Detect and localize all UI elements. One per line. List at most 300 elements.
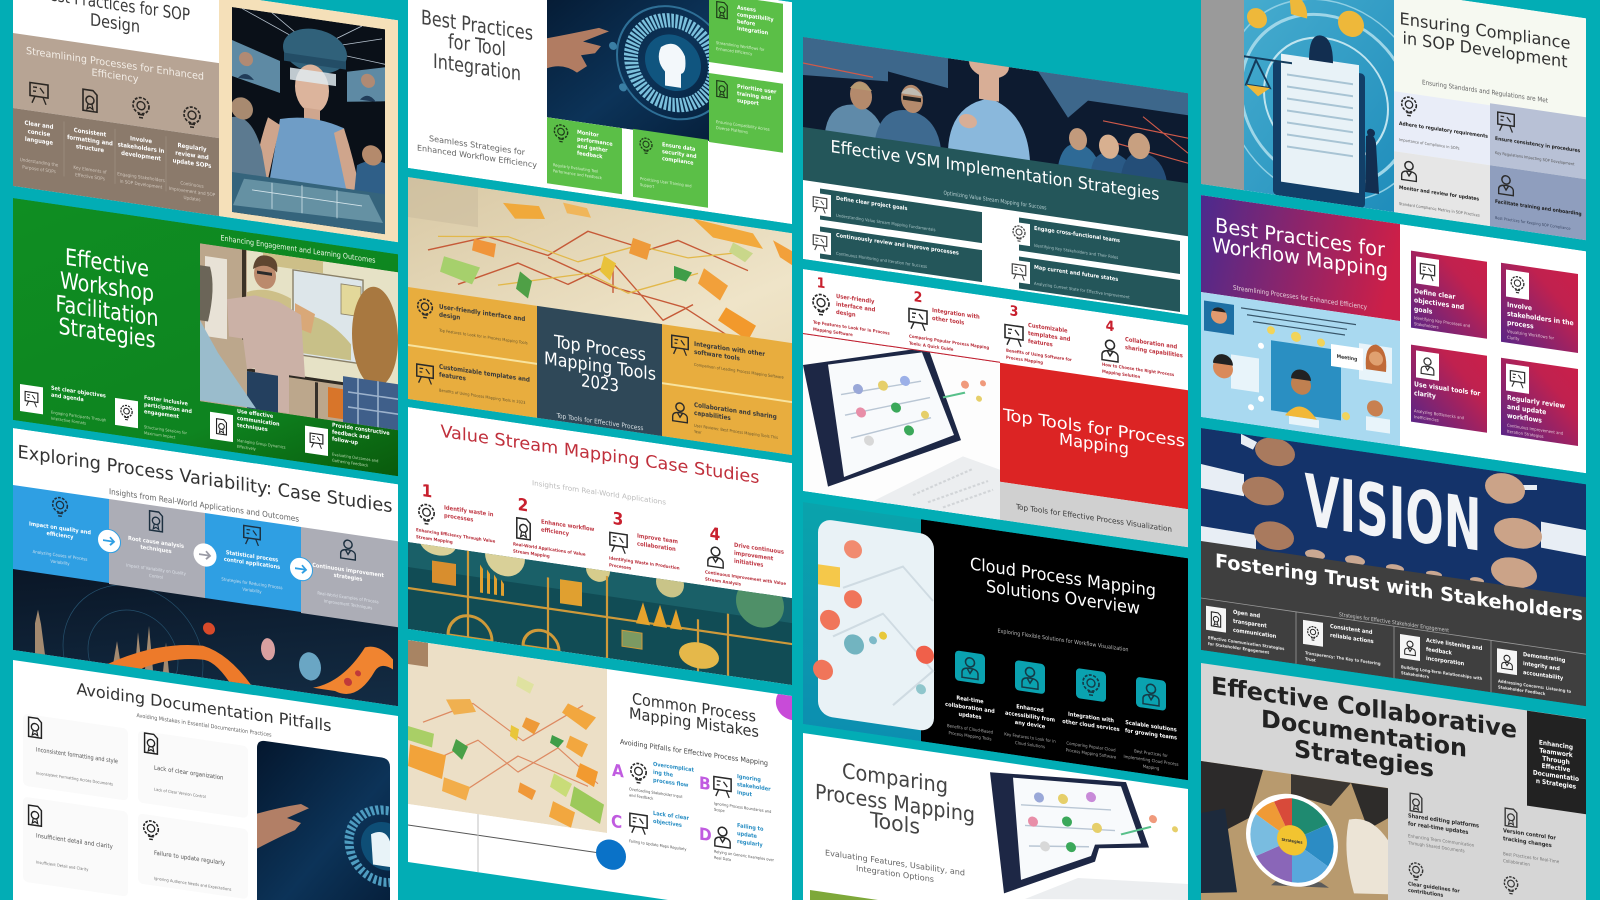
item: open communication: Open and <box>1233 610 1261 620</box>
image: VISION banner with hands <box>1201 427 1587 600</box>
red rule <box>803 333 1000 363</box>
column captions: Engaging Stakeholders <box>117 171 165 184</box>
card: define objectives: goals <box>1414 305 1433 316</box>
item: provide constructive feedback <box>305 419 390 471</box>
panel: consistency: Key Regulations Impacting SOP Development <box>1495 150 1575 167</box>
numbers: 1 <box>817 275 825 292</box>
card: monitor performance: Regularly Evaluating Tool <box>553 162 598 174</box>
subtitle: Evaluating Features, Usability, and <box>825 848 965 878</box>
item labels: Integration with <box>1068 712 1114 724</box>
item labels: improvement <box>734 551 774 562</box>
item: collaboration and sharing: Collaboration and sharing <box>694 402 777 421</box>
item labels: updates <box>959 712 981 721</box>
card: continuously review: Continuous Monitoring and Iteration for Success <box>836 251 927 269</box>
item: use effective communication: communication <box>237 416 280 428</box>
item labels <box>836 294 1183 367</box>
step captions: Control <box>149 573 163 581</box>
title <box>629 689 759 741</box>
numbers: 2 <box>518 495 528 517</box>
item: user-friendly interface: Top Features to Look for in Process Mapping Tools <box>438 327 528 345</box>
numbers: 2 <box>914 289 922 306</box>
item: consistent actions: reliable actions <box>1330 633 1374 645</box>
card: prioritize user training: Prioritize user <box>737 84 777 96</box>
icons <box>419 503 723 568</box>
item: foster inclusive participation <box>115 391 192 442</box>
item captions: Identifying Waste in Production <box>609 555 680 572</box>
numbers: 4 <box>1106 318 1115 335</box>
panel: gradient title <box>1201 195 1400 321</box>
panel: black side note: Effective <box>1542 762 1570 774</box>
item: user-friendly interface: User-friendly interface and <box>439 304 525 323</box>
card: monitor performance: Performance and Feedback <box>553 168 603 180</box>
panel: dark title block: Top Process <box>553 332 646 366</box>
title: Integration <box>433 49 521 85</box>
card: involve stakeholders: Clarity <box>1507 335 1520 342</box>
item: open communication <box>1206 606 1285 657</box>
card: define objectives: objectives and <box>1414 296 1464 311</box>
subtitle: Integration Options <box>856 864 934 884</box>
item: use effective communication: Managing Group Dynamics <box>237 438 286 450</box>
title: Mapping Mistakes <box>629 704 759 741</box>
title: Avoiding Documentation Pitfalls <box>76 679 332 735</box>
panel: gray subtitle: Top Tools for Effective Process Visualization <box>1015 502 1172 534</box>
card: engage cross-functional teams: Identifying Key Stakeholders and Their Roles <box>1034 243 1118 260</box>
column captions: Updates <box>183 195 201 203</box>
item: foster inclusive participation: participation and <box>144 402 192 415</box>
panel: gradient title: Workflow Mapping <box>1212 233 1388 282</box>
card: continuously review: Continuously review and improve processes <box>836 233 959 257</box>
column captions: Continuous <box>180 180 204 190</box>
step captions: Improvement Techniques <box>324 598 372 611</box>
subtitle: Seamless Strategies for <box>429 134 525 157</box>
image: remote collaboration illustration: Meeting <box>1337 354 1357 363</box>
step labels: Root cause analysis <box>128 536 184 550</box>
step labels: control applications <box>224 557 280 571</box>
item: integration with other tools: Comparison of Leading Process Mapping Software <box>694 362 785 380</box>
card: failure to update: Failure to update regularly <box>154 850 226 867</box>
item: user-friendly interface <box>418 298 528 345</box>
subtitle <box>825 848 965 889</box>
item: demonstrating integrity: accountability <box>1523 670 1564 682</box>
band: title: Optimizing Value Stream Mapping for Success <box>944 191 1047 212</box>
item D: D <box>699 825 712 846</box>
item C: C <box>611 812 622 833</box>
item: collaboration and sharing: capabilities <box>694 410 731 422</box>
card: define objectives: Define clear <box>1414 287 1456 301</box>
item labels: Drive continuous <box>734 543 784 556</box>
card: monitor performance: Monitor <box>577 130 599 139</box>
subtitle: Insights from Real-World Applications and Outcomes <box>109 487 299 524</box>
item: collaboration and sharing <box>673 399 778 446</box>
numbers <box>817 275 1115 335</box>
item: shared editing <box>1407 793 1479 857</box>
image: VISION banner with hands: VISION <box>1304 459 1481 569</box>
image: sticky-note process map <box>408 640 607 833</box>
item labels: User-friendly <box>836 294 875 306</box>
slide: Cloud Process Mapping Solutions Overview <box>803 502 1188 780</box>
item: shared editing: Enhancing Team Communication <box>1408 833 1475 849</box>
card: map current and future states: Analyzing Current State for Effective Improvement <box>1034 281 1130 300</box>
item: active listening: Building Long-Term Relationships with <box>1401 664 1483 681</box>
panel: adhere: Importance of Compliance in SOPs <box>1399 137 1460 151</box>
item labels: interface and <box>836 302 876 314</box>
item: open communication: Effective Communication Strategies <box>1208 635 1285 651</box>
item D: update <box>737 831 758 840</box>
card: engage cross-functional teams: Engage cross-functional teams <box>1034 226 1120 244</box>
decorative corner circle <box>776 694 792 720</box>
item labels: Real-time <box>956 695 984 705</box>
subtitle: Exploring Flexible Solutions for Workflow Visualization <box>998 628 1128 654</box>
slide: Comparing Process Mapping Tools <box>803 733 1188 900</box>
column text: development <box>121 150 161 163</box>
panel: consistency <box>1490 103 1586 179</box>
item A <box>612 756 694 807</box>
numbers: 3 <box>1010 303 1018 320</box>
gray side strip <box>1201 0 1244 190</box>
card: define project goals: Understanding Value Stream Mapping Fundamentals <box>836 213 935 232</box>
item captions <box>947 721 1178 775</box>
item: shared editing: Through Shared Documents <box>1407 840 1465 854</box>
card: prioritize user training: Ensuring Compatibility Across <box>716 119 770 132</box>
item: demonstrating integrity: Addressing Concerns: Listening to <box>1498 678 1572 694</box>
title: for Tool <box>448 29 506 61</box>
image: compliance clipboard illustration <box>1244 0 1394 212</box>
item B <box>699 769 771 820</box>
item D: Real Data <box>714 855 731 862</box>
item: version control: Best Practices for Real-Time <box>1503 851 1560 865</box>
panel: facilitate training <box>1490 165 1586 240</box>
icons row <box>30 81 200 128</box>
card: regularly review: Iteration Strategies <box>1507 429 1544 439</box>
card: continuously review <box>809 225 982 282</box>
item labels: collaboration and <box>945 702 995 715</box>
item labels: Identify waste in <box>444 505 494 519</box>
subtitle <box>26 46 204 95</box>
panel: facilitate training: Facilitate training and onboarding <box>1495 199 1582 218</box>
card: ensure data security: Ensure data <box>662 142 695 153</box>
card: define objectives: Identifying Key Processes and <box>1414 315 1471 328</box>
item labels: Customizable <box>1028 323 1068 335</box>
card: monitor performance: performance <box>577 137 613 148</box>
item labels: Enhance workflow <box>541 519 595 533</box>
subtitle: Efficiency <box>92 68 139 85</box>
card: involve stakeholders: Visualizing Workflows for <box>1507 329 1554 341</box>
item labels: initiatives <box>734 559 763 569</box>
card: prioritize user training <box>709 73 783 153</box>
item captions: Enhancing Efficiency Through Value <box>416 527 496 545</box>
column captions <box>20 157 216 206</box>
item labels: collaboration <box>637 541 676 553</box>
panel: monitor <box>1394 151 1490 226</box>
item B: Scope <box>714 807 725 813</box>
item: use effective communication: Use effective <box>237 409 274 420</box>
image: tech hand <box>257 741 421 900</box>
card: ensure data security <box>633 129 708 208</box>
item labels: for growing teams <box>1125 728 1177 742</box>
item: active listening <box>1400 634 1483 687</box>
item D: Failing to <box>737 823 764 833</box>
image: remote collaboration illustration <box>1201 292 1400 446</box>
item captions: Cloud Solutions <box>1015 740 1045 750</box>
image: dark tech landscape <box>13 566 398 764</box>
panel: monitor: Standard Compliance Metrics in SOP Practices <box>1399 201 1480 218</box>
panel: adhere <box>1394 91 1490 165</box>
title: Cloud Process Mapping <box>970 554 1156 602</box>
item captions: Top Features to Look for in Process <box>813 319 890 337</box>
title: Documentation <box>1261 705 1467 763</box>
item: active listening: incorporation <box>1426 656 1465 667</box>
item: open communication: for Stakeholder Engagement <box>1208 641 1269 655</box>
image: teal and gold art deco <box>408 542 792 685</box>
title: Comparing <box>842 758 948 798</box>
item A: and Feedback <box>629 792 654 801</box>
panel: beige image frame <box>219 0 398 242</box>
card: map current and future states: Map current and future states <box>1034 265 1118 283</box>
panel: black side note: Enhancing <box>1539 738 1573 751</box>
title: Common Process <box>632 690 756 726</box>
item: version control: Version control for <box>1503 828 1556 842</box>
photo: facilitator at projected map <box>200 243 398 430</box>
item: shared editing: for real-time updates <box>1408 821 1468 836</box>
item D: regularly <box>737 839 763 849</box>
title: Ensuring Compliance <box>1400 9 1570 53</box>
item labels: features <box>1028 339 1053 348</box>
item captions: Comparing Popular Cloud <box>1066 740 1116 754</box>
item: demonstrating integrity: integrity and <box>1523 661 1560 672</box>
column text: structure <box>76 143 104 154</box>
item: provide constructive feedback: Provide constructive <box>332 423 390 437</box>
item: open communication: transparent <box>1233 619 1267 630</box>
slide: Best Practices for Workflow Mapping <box>1201 195 1586 473</box>
item D <box>699 818 775 869</box>
numbers: 4 <box>710 524 720 546</box>
column captions: Key Elements of <box>73 165 107 176</box>
item C: objectives <box>653 819 682 829</box>
card: assess compatibility: integration <box>737 26 769 37</box>
item: use effective communication <box>210 405 286 456</box>
image: monitor with flow diagram <box>803 334 1000 520</box>
step captions: Variability <box>242 587 262 595</box>
title <box>40 0 190 45</box>
item labels: efficiency <box>541 527 570 538</box>
item: set clear objectives <box>20 381 106 429</box>
item captions <box>416 527 786 594</box>
column text: stakeholders in <box>118 141 165 155</box>
title: Effective Collaborative <box>1211 672 1517 744</box>
panel: dark title block: Top Tools for Effective Process <box>556 412 643 432</box>
card: assess compatibility: Assess <box>737 5 756 14</box>
image: monitor with flow diagram <box>990 762 1188 900</box>
title: Strategies <box>1294 735 1434 783</box>
subtitle: Insights from Real-World Applications <box>532 478 666 507</box>
item: consistent actions: Consistent and <box>1330 624 1373 636</box>
card: define objectives: Stakeholders <box>1414 321 1439 330</box>
item B: stakeholder <box>737 782 771 793</box>
item: consistent actions: Transparency: The Key to Fostering <box>1305 650 1381 666</box>
item captions: Real-World Applications of Value <box>513 541 586 558</box>
card: ensure data security: security and <box>662 149 697 160</box>
card: involve stakeholders: stakeholders in the <box>1507 310 1574 327</box>
item: integration with other tools: software tools <box>694 349 740 363</box>
title: Value Stream Mapping Case Studies <box>440 422 759 488</box>
card: regularly review <box>1501 358 1578 446</box>
item captions <box>813 319 1175 385</box>
image: team around colour wheel <box>1201 761 1388 900</box>
item: set clear objectives: Engaging Participants Through <box>51 410 106 423</box>
card: regularly review: and update <box>1507 403 1546 416</box>
title: Design <box>90 10 140 38</box>
item: active listening: Active listening and <box>1426 638 1483 652</box>
item captions: Process Mapping Software <box>1066 747 1117 761</box>
item labels: other cloud services <box>1062 719 1120 733</box>
item: demonstrating integrity: Stakeholder Feedback <box>1498 684 1546 696</box>
subtitle: Avoiding Mistakes in Essential Documentation Practices <box>136 713 272 739</box>
icons <box>955 650 1166 712</box>
title: Facilitation <box>55 291 158 332</box>
title: Best Practices <box>421 5 533 45</box>
image: process map with sticky notes <box>408 177 792 455</box>
slide: Value Stream Mapping Case Studies <box>408 407 792 685</box>
slide: Best Practices for Tool Integration <box>408 0 792 224</box>
item captions: Best Practices for <box>1134 748 1168 759</box>
item A: Overloading Stakeholder Input <box>629 786 683 799</box>
item: foster inclusive participation: Foster inclusive <box>144 395 189 408</box>
item: collaboration and sharing: Year <box>694 429 702 435</box>
card: regularly review: workflows <box>1507 412 1542 425</box>
card: engage cross-functional teams <box>1008 216 1180 274</box>
item: version control: tracking changes <box>1503 836 1552 849</box>
title: in SOP Development <box>1402 28 1568 72</box>
slide: Exploring Process Variability <box>13 428 398 764</box>
step labels: Statistical process <box>226 550 278 564</box>
item: customizable templates: features <box>439 372 466 383</box>
item captions: Benefits of Using Software for <box>1006 348 1072 363</box>
column captions: Effective SOPs <box>75 172 105 182</box>
title <box>1400 9 1570 72</box>
card: regularly review: Continuous Improvement and <box>1507 423 1564 436</box>
card: failure to update <box>138 813 248 899</box>
card: ensure data security: compliance <box>662 156 694 167</box>
item labels: templates and <box>1028 331 1071 343</box>
card: insufficient detail: Insufficient Detail and Clarity <box>36 859 89 872</box>
column text <box>25 120 211 170</box>
item labels: Enhanced <box>1016 704 1044 714</box>
item: foster inclusive participation: Maximum Impact <box>144 430 176 440</box>
column captions: in SOP Development <box>120 179 163 191</box>
title: Effective <box>65 245 149 283</box>
item: version control <box>1503 808 1560 872</box>
card: assess compatibility: compatibility <box>737 12 774 23</box>
step captions: Impact of Variability on Quality <box>126 563 187 577</box>
process bands <box>13 485 398 627</box>
card: monitor performance: feedback <box>577 151 603 160</box>
card: assess compatibility: Enhanced Efficiency <box>716 46 753 56</box>
slide: Ensuring Compliance in SOP Development <box>1201 0 1586 240</box>
title <box>421 5 533 87</box>
card: failure to update: Ignoring Audience Needs and Expectations <box>154 876 231 892</box>
item labels: Collaboration and <box>1125 337 1178 351</box>
slide: Avoiding Documentation Pitfalls <box>13 660 421 900</box>
card: lack of clear organization: Lack of Clear Version Control <box>154 787 206 799</box>
card: visual tools <box>1411 345 1487 433</box>
title <box>55 243 158 354</box>
panel: gray subtitle <box>1000 482 1188 547</box>
slide: Effective Collaborative Documentation Strategies <box>1201 663 1586 900</box>
card: prioritize user training: Diverse Platforms <box>716 125 748 135</box>
panel: gradient title: Best Practices for <box>1215 213 1386 262</box>
step captions: Real-World Examples of Process <box>317 590 379 605</box>
card: assess compatibility: Streamlining Workflows for <box>716 40 765 52</box>
item: customizable templates <box>417 360 530 406</box>
band: dark panel <box>1201 541 1586 706</box>
item: provide constructive feedback: Gathering Feedback <box>332 458 369 468</box>
card: monitor performance: and gather <box>577 144 608 154</box>
step captions: Analyzing Causes of Process <box>33 549 87 563</box>
step captions: Variability <box>50 558 70 567</box>
title: Exploring Process Variability: Case Studies <box>17 442 392 517</box>
column text: language <box>25 136 53 147</box>
icons <box>53 497 355 560</box>
card: inconsistent formatting: Inconsistent formatting and style <box>36 746 119 765</box>
item labels: Integration with <box>932 308 980 321</box>
title: Solutions Overview <box>986 577 1140 619</box>
lower diagram lines <box>408 804 626 894</box>
item captions: Process Mapping <box>1006 355 1043 366</box>
item captions: Mapping Software <box>813 326 853 338</box>
item: use effective communication: Effectively <box>237 444 257 452</box>
item: provide constructive feedback: Evaluating Outcomes and <box>332 452 378 463</box>
card: inconsistent formatting: Inconsistent Formatting Across Documents <box>36 770 113 787</box>
item: demonstrating integrity <box>1497 648 1572 700</box>
item: consistent actions: Trust <box>1305 656 1316 663</box>
item: provide constructive feedback: feedback and <box>332 430 370 441</box>
item captions: Process Mapping Tools <box>948 730 992 743</box>
panel: left amber items <box>408 287 537 418</box>
item A: process flow <box>653 778 689 789</box>
item B: Ignoring <box>737 774 761 784</box>
card: involve stakeholders: process <box>1507 319 1534 331</box>
slide: Effective Workshop Facilitation Strategies <box>13 198 398 476</box>
item captions: Stream Mapping <box>416 534 453 546</box>
panel: right amber items <box>662 324 792 455</box>
item: user-friendly interface: design <box>439 312 460 322</box>
image: woman with helmet at holographic table <box>232 7 385 234</box>
slide: Top Tools for Process Mapping <box>803 269 1188 547</box>
panel: consistency: Ensure consistency in procedures <box>1495 136 1580 154</box>
card: prioritize user training: training and <box>737 91 772 102</box>
subtitle <box>417 132 538 170</box>
card: prioritize user training: support <box>737 98 759 107</box>
panel: adhere: Adhere to regulatory requirements <box>1399 121 1488 140</box>
item captions: Stream Mapping <box>513 548 550 560</box>
item captions: Processes <box>609 562 632 572</box>
image: team around colour wheel: Strategies <box>1281 837 1303 845</box>
title: Process Mapping <box>815 779 975 827</box>
item A: A <box>612 761 624 783</box>
item B: B <box>699 774 711 795</box>
item: version control: Collaboration <box>1503 858 1530 868</box>
panel: black side note: Through <box>1542 754 1570 766</box>
item D: Relying on Generic Examples over <box>714 849 775 863</box>
numbers: 1 <box>422 481 432 503</box>
column captions: Understanding the <box>20 157 59 169</box>
card: visual tools: Inefficiencies <box>1414 414 1439 423</box>
step labels: efficiency <box>47 531 74 541</box>
step captions <box>33 549 379 612</box>
card: involve stakeholders <box>1501 263 1578 353</box>
icons <box>813 293 1118 362</box>
item: customizable templates: Benefits of Using Process Mapping Tools in 2023 <box>439 388 526 405</box>
